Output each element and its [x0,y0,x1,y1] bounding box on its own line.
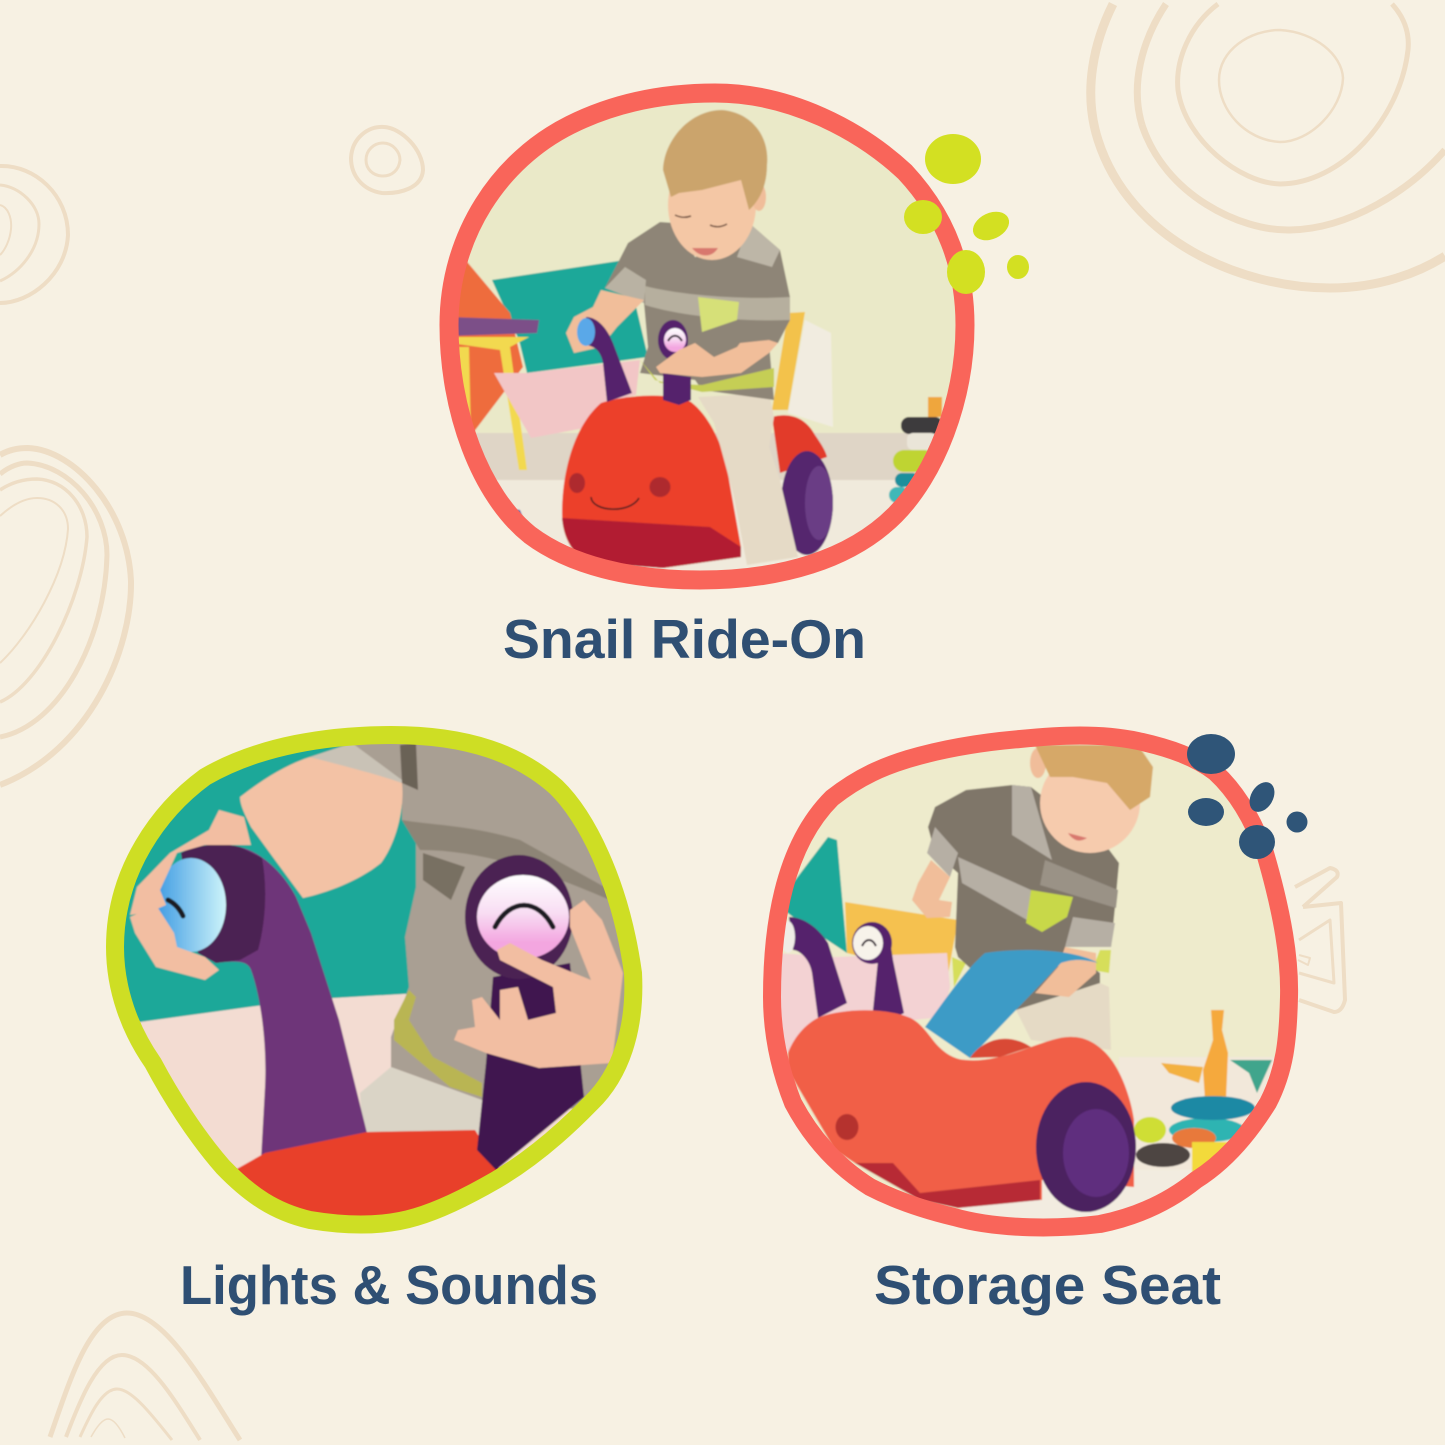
shirt [354,744,624,1110]
head [1040,753,1140,853]
icon: lime dots [904,134,1029,294]
snail face [569,473,585,493]
yellow cushion [844,901,957,971]
wheel [1036,1082,1136,1212]
patterned pillow [494,360,640,438]
heading: Storage Seat: Storage Seat [874,1254,1221,1316]
pants [1016,983,1111,1050]
teal cushion [124,746,417,1023]
waist [394,990,482,1097]
pocket [1026,890,1073,932]
stalks [789,917,847,1018]
head [668,180,756,261]
teal cushion [780,837,847,953]
stool [450,337,529,470]
left arm [566,290,644,353]
left arm [912,860,952,918]
panel: Snail Ride-On photo [430,85,980,590]
shirt [605,222,790,400]
teal sofa cushion [492,260,648,373]
right arm [1035,947,1096,997]
pink eye [477,875,569,959]
frame: coral ring [449,93,965,580]
red body [237,1129,499,1216]
patterned pillow [775,953,950,1053]
floor [1119,1057,1274,1170]
panel: Lights & Sounds photo [100,725,650,1245]
back cushions [788,320,833,427]
lime hem [952,950,1111,987]
wheel [781,451,833,555]
wall [468,102,956,434]
blue seat lid [925,950,1098,1058]
stacking rings [889,397,943,503]
right hand [454,900,623,1068]
big arm [240,757,403,898]
icon: navy dots [1187,734,1308,859]
big stalk [225,846,368,1156]
right stalk [477,963,584,1170]
left hand [130,810,251,915]
frame: lime ring [115,735,633,1224]
orange pillow [458,262,524,431]
toys [1134,1010,1272,1175]
heading: Snail Ride-On: Snail Ride-On [503,608,866,670]
shell back [772,415,827,473]
left eye stalk [586,317,632,402]
heading: Lights & Sounds: Lights & Sounds [180,1254,598,1316]
right eye stalk [663,373,691,405]
snail body [562,396,741,568]
purple toy [517,508,524,516]
waist stripe [640,360,774,392]
pants [360,1067,482,1135]
right arm [656,340,778,377]
frame: coral ring [772,736,1289,1227]
child shirt [928,785,1119,1010]
blue eye [156,858,226,952]
snail body [788,1010,1134,1200]
pants [698,393,798,565]
panel: Storage Seat photo [760,725,1300,1240]
floor [140,992,572,1170]
